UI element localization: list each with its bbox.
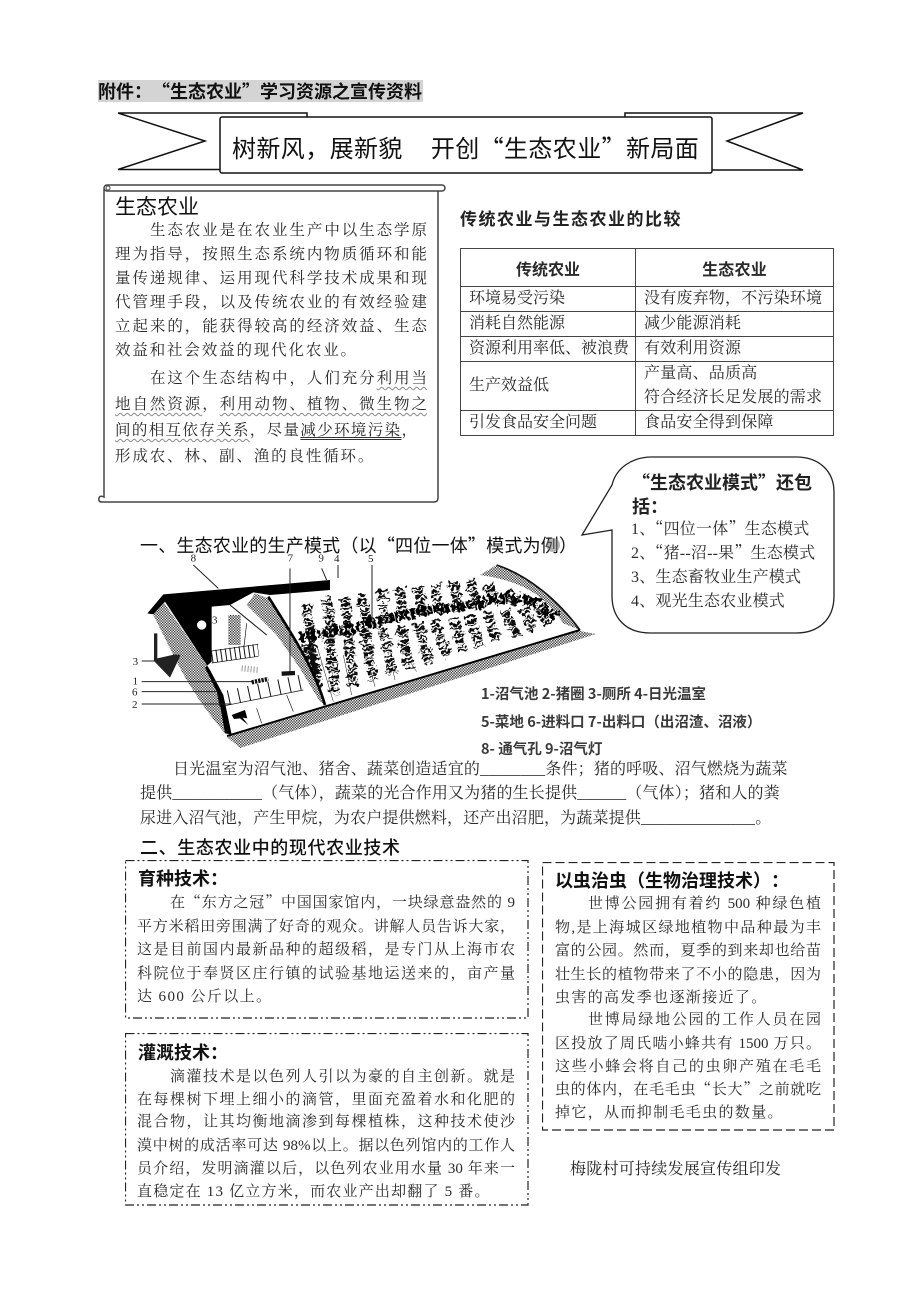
section heading one: 一、生态农业的生产模式（以“四位一体”模式为例） (140, 532, 577, 558)
irrigation text: 直稳定在 13 亿立方米，而农业产出却翻了 5 番。 (137, 1184, 491, 1200)
diagram numbers: 1 (133, 675, 138, 687)
callout heading: 括： (632, 493, 668, 519)
definition paragraph (115, 222, 427, 359)
panel: breeding technology (125, 860, 529, 1019)
fill-in paragraph: 日光温室为沼气池、猪舍、蔬菜创造适宜的________条件；猪的呼吸、沼气燃烧为蔬菜 (173, 761, 788, 778)
resource cycle paragraph (115, 370, 427, 465)
pest control text: 物,是上海城区绿地植物中品种最为丰 (555, 920, 821, 936)
callout list: 2、“猪--沼--果”生态模式 (631, 540, 815, 563)
callout list: 1、“四位一体”生态模式 (631, 516, 809, 539)
attachment heading: 附件：“生态农业”学习资源之宣传资料 (98, 78, 422, 104)
resource cycle paragraph: 在这个生态结构中，人们充分利用当 (150, 370, 427, 387)
middle hatched arch (247, 593, 325, 705)
lamp circle (197, 620, 206, 630)
irrigation text: 混合物，让其均衡地滴渗到每棵植株，这种技术使沙 (137, 1114, 515, 1130)
breeding text: 科院位于奉贤区庄行镇的试验基地运送来的，亩产量 (137, 966, 515, 982)
fill-in paragraph: 提供___________（气体），蔬菜的光合作用又为猪的生长提供______（气体）；猪和人的粪 (140, 785, 780, 802)
diagram numbers (132, 553, 324, 711)
definition paragraph: 量传递规律、运用现代科学技术成果和现 (115, 270, 427, 287)
pest control text: 区投放了周氏啮小蜂共有 1500 万只。 (555, 1036, 821, 1052)
pest control text: 壮生长的植物带来了不小的隐患，因为 (555, 967, 821, 983)
comparison table: 减少能源消耗 (644, 315, 741, 332)
comparison table: 消耗自然能源 (469, 315, 565, 332)
pig (232, 710, 248, 725)
comparison table (460, 248, 834, 436)
resource cycle paragraph: 间的相互依存关系，尽量减少环境污染， (115, 422, 417, 439)
callout list (631, 516, 815, 610)
pest control text: 虫害的高发季也逐渐接近了。 (555, 990, 768, 1006)
diagram legend: 5-菜地 6-进料口 7-出料口（出沼渣、沼液） (481, 710, 761, 732)
irrigation text (137, 1068, 515, 1200)
definition paragraph: 立起来的，能获得较高的经济效益、生态 (115, 318, 427, 335)
callout list: 4、观光生态农业模式 (631, 593, 785, 610)
end wall and house (132, 553, 330, 734)
definition paragraph: 理为指导，按照生态系统内物质循环和能 (115, 246, 427, 263)
breeding text (137, 891, 515, 1005)
comparison table: 传统农业 (516, 256, 580, 280)
comparison table: 有效利用资源 (644, 340, 741, 357)
diagram legend (481, 683, 761, 759)
callout heading (632, 469, 812, 519)
diagram numbers: 9 (318, 553, 324, 565)
diagram numbers: 2 (132, 699, 137, 711)
comparison table: 生产效益低 (469, 377, 549, 394)
comparison table: 引发食品安全问题 (469, 414, 597, 431)
house interior (212, 605, 303, 723)
leader lines (142, 565, 327, 704)
irrigation text: 员介绍，发明滴灌以后，以色列农业用水量 30 年来一 (137, 1161, 515, 1177)
comparison table: 资源利用率低、被浪费 (469, 340, 629, 357)
callout: other models (580, 456, 835, 634)
pest control text (555, 895, 821, 1121)
definition paragraph: 代管理手段，以及传统农业的有效经验建 (115, 294, 427, 311)
irrigation text: 滴灌技术是以色列人引以为豪的自主创新。就是 (170, 1069, 515, 1085)
comparison table: 产量高、品质高 (644, 365, 757, 382)
breeding text: 达 600 公斤以上。 (137, 989, 272, 1005)
section heading two: 二、生态农业中的现代农业技术 (140, 834, 400, 860)
diagram: four-in-one greenhouse (132, 553, 595, 748)
panel: biological pest control (542, 862, 835, 1131)
upper numbers 4 and 5 (334, 553, 374, 625)
greenhouse field and plants (300, 565, 580, 702)
comparison heading: 传统农业与生态农业的比较 (460, 205, 682, 230)
irrigation text: 漠中树的成活率可达 98%以上。据以色列馆内的工作人 (137, 1138, 515, 1154)
panel: definition scroll (98, 184, 446, 503)
definition paragraph: 效益和社会效益的现代化农业。 (115, 342, 358, 359)
callout heading: “生态农业模式”还包 (632, 469, 812, 495)
banner title text: 树新风，展新貌 开创“生态农业”新局面 (232, 129, 699, 164)
pest control text: 掉它，从而抑制毛毛虫的数量。 (555, 1105, 784, 1121)
pest control heading: 以虫治虫（生物治理技术）： (555, 867, 789, 893)
resource cycle paragraph: 形成农、林、副、渔的良性循环。 (115, 448, 375, 465)
irrigation heading: 灌溉技术： (138, 1039, 228, 1065)
pest control text: 虫的体内，在毛毛虫“长大”之前就吃 (555, 1078, 821, 1099)
upper numbers 4 and 5: 5 (368, 553, 374, 565)
diagram numbers: 6 (132, 687, 138, 699)
breeding text: 平方米稻田旁围满了好奇的观众。讲解人员告诉大家， (137, 919, 515, 935)
roof and black gable (147, 580, 330, 734)
diagram numbers: 7 (288, 553, 294, 565)
breeding text: 在“东方之冠”中国国家馆内，一块绿意盎然的 9 (170, 891, 515, 912)
diagram numbers: 8 (191, 553, 197, 565)
definition paragraph: 生态农业是在农业生产中以生态学原 (150, 222, 427, 239)
left hatched gable (153, 602, 225, 733)
latrine (154, 633, 181, 678)
title banner (118, 112, 804, 174)
pest control text: 世博局绿地公园的工作人员在园 (588, 1012, 821, 1028)
pest control text: 世博公园拥有着约 500 种绿色植 (588, 896, 821, 912)
floor strip (227, 630, 596, 748)
comparison table: 符合经济长足发展的需求 (644, 389, 822, 406)
diagram legend: 1-沼气池 2-猪圈 3-厕所 4-日光温室 (481, 683, 706, 704)
fill-in paragraph: 尿进入沼气池，产生甲烷，为农户提供燃料，还产出沼肥，为蔬菜提供______________。 (140, 810, 771, 827)
pest control text: 这些小蜂会将自己的虫卵产殖在毛毛 (555, 1059, 821, 1075)
scroll heading: 生态农业 (115, 191, 199, 221)
breeding text: 这是目前国内最新品种的超级稻，是专门从上海市农 (137, 942, 515, 958)
diagram numbers: 3 (133, 656, 139, 668)
comparison table: 食品安全得到保障 (644, 414, 774, 431)
resource cycle paragraph: 地自然资源，利用动物、植物、微生物之 (115, 396, 427, 413)
pest control text: 富的公园。然而，夏季的到来却也给苗 (555, 943, 821, 959)
icon: ink blot (546, 538, 560, 552)
comparison table: 环境易受污染 (469, 290, 565, 307)
irrigation text: 在每棵树下埋上细小的滴管，里面充盈着水和化肥的 (137, 1092, 515, 1108)
fill-in paragraph (140, 760, 788, 827)
diagram legend: 8- 通气孔 9-沼气灯 (481, 738, 602, 759)
breeding heading: 育种技术： (138, 865, 228, 891)
footer issuer: 梅陇村可持续发展宣传组印发 (570, 1161, 781, 1178)
upper numbers 4 and 5: 4 (334, 553, 340, 565)
callout list: 3、生态畜牧业生产模式 (631, 569, 801, 586)
comparison table: 没有废弃物，不污染环境 (644, 290, 822, 307)
panel: irrigation technology (125, 1033, 529, 1206)
comparison table: 生态农业 (702, 256, 767, 280)
diagram numbers: 3 (212, 614, 218, 626)
